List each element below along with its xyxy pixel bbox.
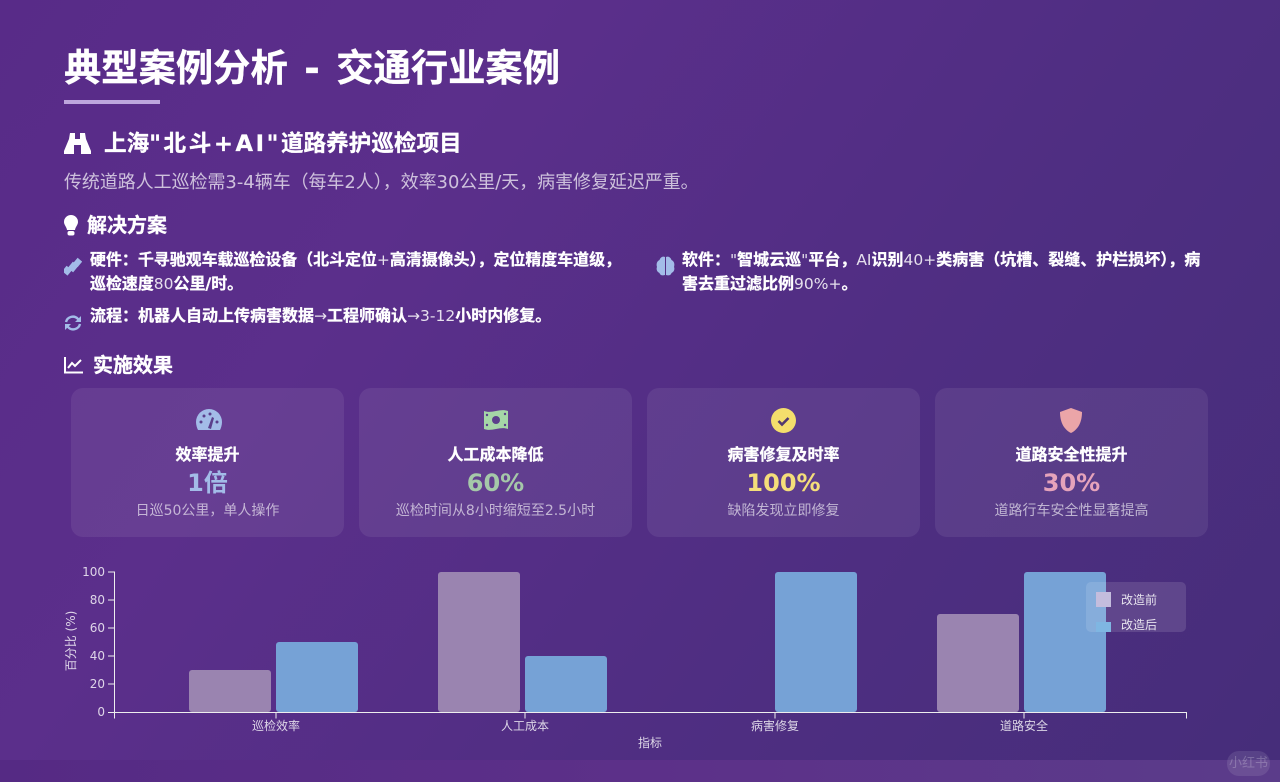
watermark: 小红书 [1229,756,1268,771]
hardware item [90,250,621,293]
card: labour cost [359,388,632,537]
icon: binoculars [64,133,91,154]
legend: 改造前 [1121,592,1157,607]
title underline [64,100,160,104]
hardware item: 硬件：千寻驰观车载巡检设备（北斗定位+高清摄像头），定位精度车道级， [90,250,621,269]
x axis labels: 道路安全 [1000,718,1048,733]
icon: lightbulb [64,215,78,236]
icon: shield [1060,408,1082,433]
y axis labels: 60 [90,621,105,635]
icon: brain [656,256,674,276]
y axis labels: 40 [90,649,105,663]
icon: satellite [64,258,82,276]
icon: banknote [484,410,508,430]
y axis labels: 0 [97,705,105,719]
title: 典型案例分析 - 交通行业案例 [64,46,560,90]
after bars [276,572,1106,712]
card value: 60% [467,469,524,497]
card title: 效率提升 [175,445,240,464]
legend: 改造后 [1121,618,1157,632]
project description: 传统道路人工巡检需3-4辆车（每车2人），效率30公里/天，病害修复延迟严重。 [64,172,699,193]
software item [682,250,1200,293]
y axis title: 百分比 (%) [64,611,78,671]
x axis labels [252,718,1048,733]
card value: 100% [746,469,821,497]
x axis title: 指标 [638,735,662,750]
card: road safety [935,388,1208,537]
software item: 软件："智城云巡"平台，AI识别40+类病害（坑槽、裂缝、护栏损坏），病 [682,250,1200,269]
x axis labels: 巡检效率 [252,718,300,733]
card: repair timeliness [647,388,920,537]
before bars [189,572,1019,712]
card description: 日巡50公里，单人操作 [136,503,279,519]
icon: line chart [64,357,83,374]
card value: 1倍 [187,469,228,497]
watermark [1227,751,1270,776]
card description: 缺陷发现立即修复 [728,503,840,519]
icon: check circle [771,408,796,433]
process item: 流程：机器人自动上传病害数据→工程师确认→3-12小时内修复。 [90,306,551,325]
card title: 病害修复及时率 [727,445,840,464]
y axis labels: 80 [90,593,105,607]
card description: 道路行车安全性显著提高 [994,503,1148,519]
card: efficiency [71,388,344,537]
y axis labels [82,565,105,719]
x axis labels: 人工成本 [501,719,549,733]
software item: 害去重过滤比例90%+。 [682,274,857,293]
icon: sync arrows [64,315,82,331]
hardware item: 巡检速度80公里/时。 [90,274,243,293]
project heading: 上海"北斗+AI"道路养护巡检项目 [104,131,462,157]
y axis labels: 100 [82,565,105,579]
legend [1086,582,1186,632]
icon: gauge [196,409,222,430]
results heading: 实施效果 [93,353,173,377]
card description: 巡检时间从8小时缩短至2.5小时 [396,503,595,519]
card title: 道路安全性提升 [1015,445,1128,464]
card value: 30% [1043,469,1100,497]
card title: 人工成本降低 [447,445,544,464]
axes [108,572,1186,718]
bar chart [64,565,1187,750]
y axis labels: 20 [90,677,105,691]
solution heading: 解决方案 [87,213,167,237]
x axis labels: 病害修复 [751,718,799,733]
